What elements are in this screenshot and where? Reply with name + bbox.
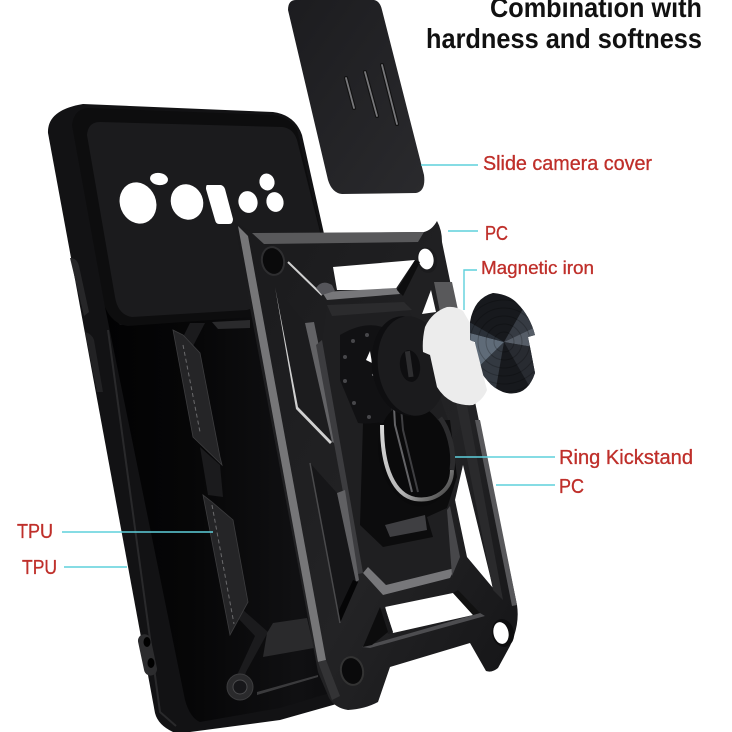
bottom bar highlights (362, 613, 485, 648)
callout labels: PC (485, 223, 508, 245)
right inner strip (438, 312, 503, 600)
lower-left indent (310, 463, 359, 623)
hard PC frame (234, 221, 518, 710)
top-left screw hole (259, 245, 287, 277)
right upper gray arm (434, 282, 458, 312)
top-right hole (415, 245, 439, 275)
center plate (322, 303, 460, 595)
camera bump (72, 108, 332, 326)
bottom-left screw hole (338, 655, 366, 687)
phone glimpse through bottom window (380, 608, 393, 634)
round hinge disc (365, 312, 453, 420)
callout labels: TPU (22, 557, 57, 579)
charging port slots (137, 633, 158, 677)
callout labels (17, 153, 693, 579)
ring kickstand (369, 372, 461, 513)
leader lines (62, 165, 555, 567)
slide camera cover (288, 0, 424, 194)
rivet plate (340, 325, 392, 424)
callout labels: Magnetic iron (481, 258, 594, 278)
metal magnetic disc (470, 293, 535, 394)
title: hardness and softness (426, 23, 702, 54)
TPU rail struts (183, 320, 318, 695)
cross-bar details (288, 262, 322, 295)
camera cut-outs (113, 172, 286, 229)
callout labels: TPU (17, 521, 53, 543)
callout labels: PC (559, 476, 584, 498)
TPU pad upper (173, 330, 222, 465)
bottom-right hole (489, 617, 517, 649)
TPU pad bottom (263, 618, 314, 657)
TPU pad lower (203, 495, 248, 635)
kickstand base (360, 420, 457, 547)
inner cavity (105, 307, 345, 722)
callout labels: Ring Kickstand (559, 447, 693, 469)
grip lines (346, 65, 397, 124)
top gray bar (252, 232, 424, 244)
left indent (275, 287, 339, 445)
callout labels: Slide camera cover (483, 153, 652, 175)
left edge highlight (108, 330, 176, 726)
white adhesive disc (423, 307, 487, 405)
small gray ornament (316, 283, 335, 295)
title (426, 0, 702, 54)
screw (227, 674, 253, 700)
phone case (TPU back) (48, 104, 388, 732)
side buttons (70, 258, 89, 316)
brushed concentric rings (470, 293, 534, 392)
left gray edge (238, 226, 326, 662)
